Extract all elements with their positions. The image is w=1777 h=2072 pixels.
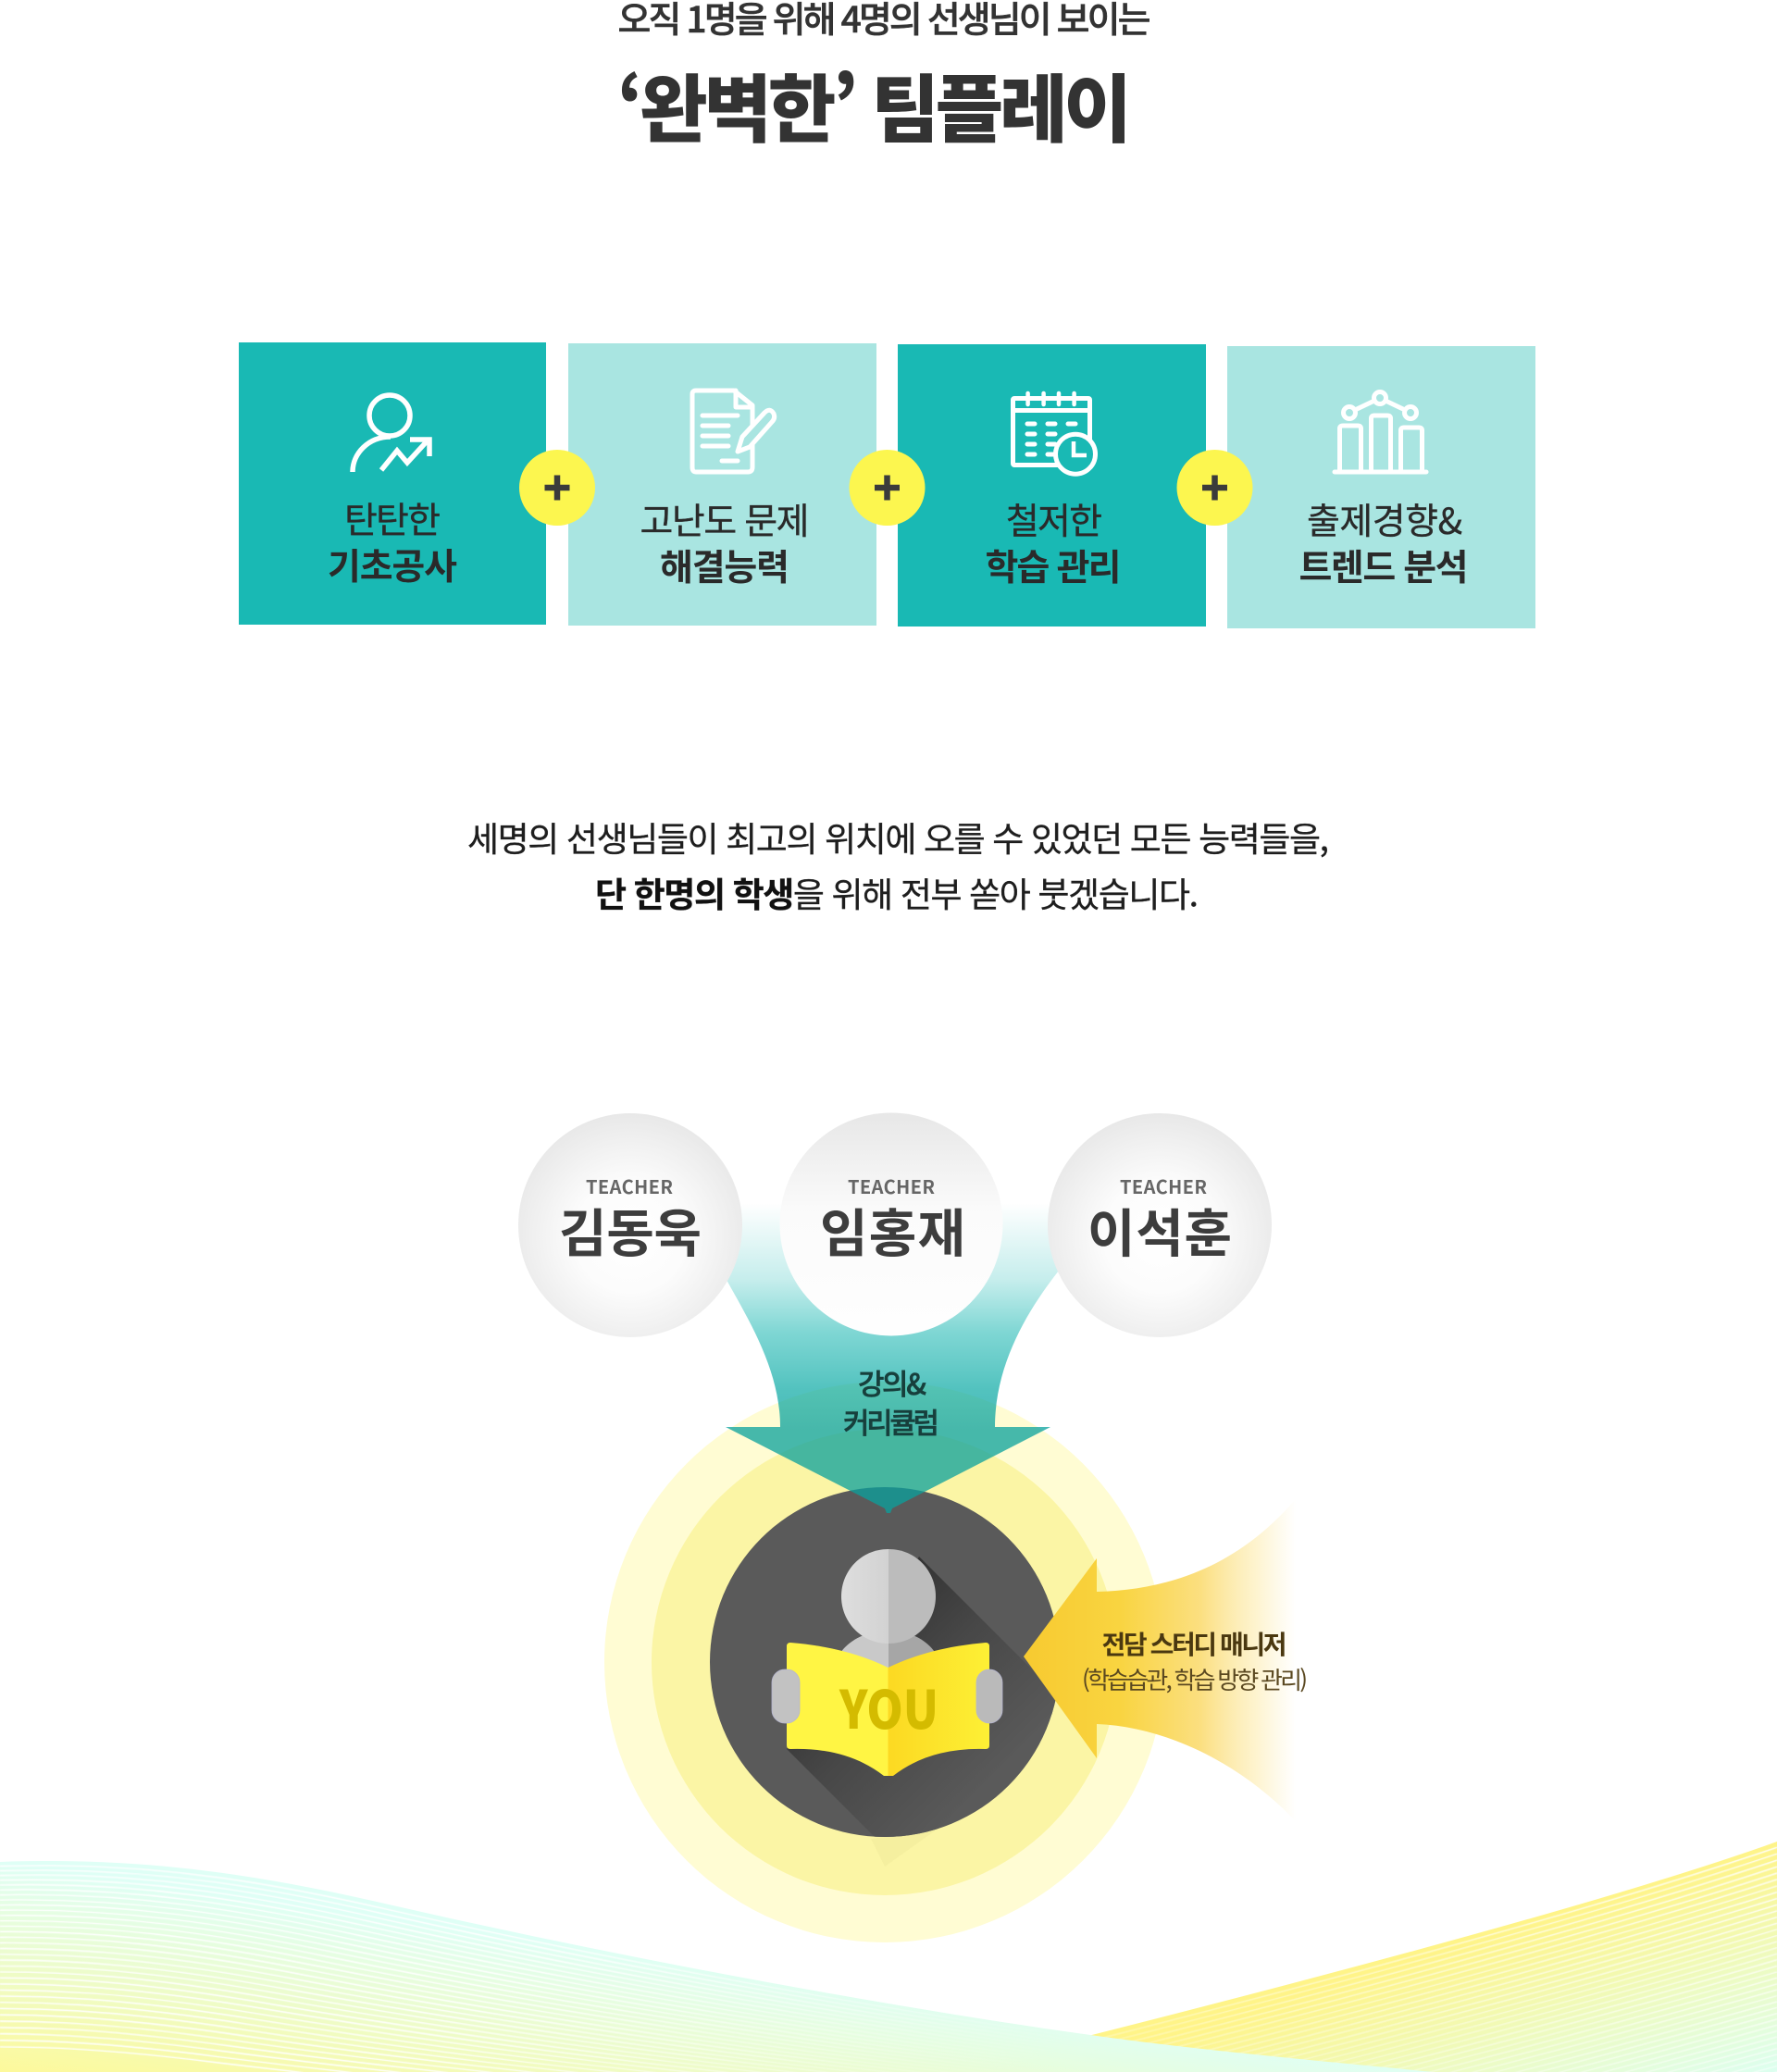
text: card 1 label: 탄탄한	[344, 492, 441, 544]
panel: hard problem solving card	[568, 343, 876, 626]
title: main heading: ‘완벽한’ 팀플레이	[617, 51, 1132, 158]
text: lecture and curriculum label: 강의&	[858, 1361, 926, 1403]
text: study manager label: 전담 스터디 매니저	[1101, 1625, 1286, 1662]
text: card 4 label	[1299, 493, 1468, 591]
icon: bar chart with trend line	[1335, 392, 1426, 472]
icon: person with rising arrow	[353, 395, 429, 472]
text: study manager label	[1082, 1625, 1308, 1696]
text: card 2 label	[640, 493, 809, 591]
text: card 3 label	[985, 493, 1122, 591]
text: card 3 label: 학습 관리	[985, 540, 1122, 591]
text: card 2 label: 해결능력	[660, 540, 789, 591]
arrow: teal lecture and curriculum arrow	[726, 1203, 1059, 1513]
panel: solid foundation card	[239, 342, 546, 625]
long shadow	[787, 1557, 1055, 1837]
panel: teacher circle Lim Hong-jae: 임홍재	[820, 1193, 965, 1268]
panel: teacher circle Kim Dong-uk: 김동욱	[559, 1193, 702, 1268]
panel: teacher circle Lee Seok-hoon: 이석훈	[1087, 1193, 1232, 1268]
text: card 1 label: 기초공사	[328, 539, 457, 590]
person shoulders	[833, 1631, 888, 1677]
panel: teacher circle Lim Hong-jae: TEACHER	[848, 1172, 935, 1199]
panel: teacher circle Lee Seok-hoon: TEACHER	[1120, 1172, 1207, 1199]
hands	[772, 1669, 800, 1723]
panel: thorough management card	[898, 344, 1206, 627]
text: lecture and curriculum label: 커리큘럼	[843, 1400, 939, 1442]
diagram: you at the centre, glow rings	[604, 1382, 1165, 1942]
soft shadow tip on the ring	[871, 1830, 937, 1867]
panel: teacher circle Lee Seok-hoon	[1048, 1113, 1272, 1337]
icon: student reading a book	[710, 1487, 1064, 1865]
text: card 2 label: 고난도 문제	[640, 493, 809, 545]
icon: document and pencil	[692, 391, 775, 472]
icon: plus badge 1	[519, 450, 595, 526]
text block: promise paragraph: 단 한명의 학생을 위해 전부 쏟아 붓겠습니다.	[595, 867, 1199, 917]
book right page	[888, 1643, 989, 1776]
panel: teacher circle Kim Dong-uk	[518, 1113, 742, 1337]
panel: teacher circle Lim Hong-jae	[779, 1112, 1003, 1336]
person head	[841, 1549, 888, 1644]
icon: plus badge 3	[1177, 450, 1253, 526]
text: card 3 label: 철저한	[1006, 493, 1102, 545]
decorative wave: right yellow	[944, 1842, 1777, 2072]
text: card 4 label: 트렌드 분석	[1299, 540, 1468, 591]
text: study manager label: (학습습관, 학습 방향 관리)	[1082, 1662, 1308, 1696]
text: lecture and curriculum label	[843, 1361, 939, 1442]
text block: promise paragraph: 세명의 선생님들이 최고의 위치에 오를 수 있었던 모든 능력들을,	[467, 812, 1329, 862]
book label: YOU	[839, 1669, 938, 1744]
text: card 4 label: 출제경향&	[1307, 493, 1462, 545]
panel: exam trend analysis card	[1227, 346, 1535, 628]
book left page	[787, 1643, 888, 1776]
arrow: yellow study manager arrow	[1024, 1499, 1308, 1821]
icon: calendar with clock	[1013, 393, 1096, 474]
panel: teacher circle Kim Dong-uk: TEACHER	[586, 1172, 673, 1199]
decorative wave: left mint	[0, 1861, 1433, 2072]
text block: promise paragraph	[467, 812, 1329, 917]
icon: plus badge 2	[850, 450, 926, 526]
text: card 1 label	[328, 492, 457, 590]
